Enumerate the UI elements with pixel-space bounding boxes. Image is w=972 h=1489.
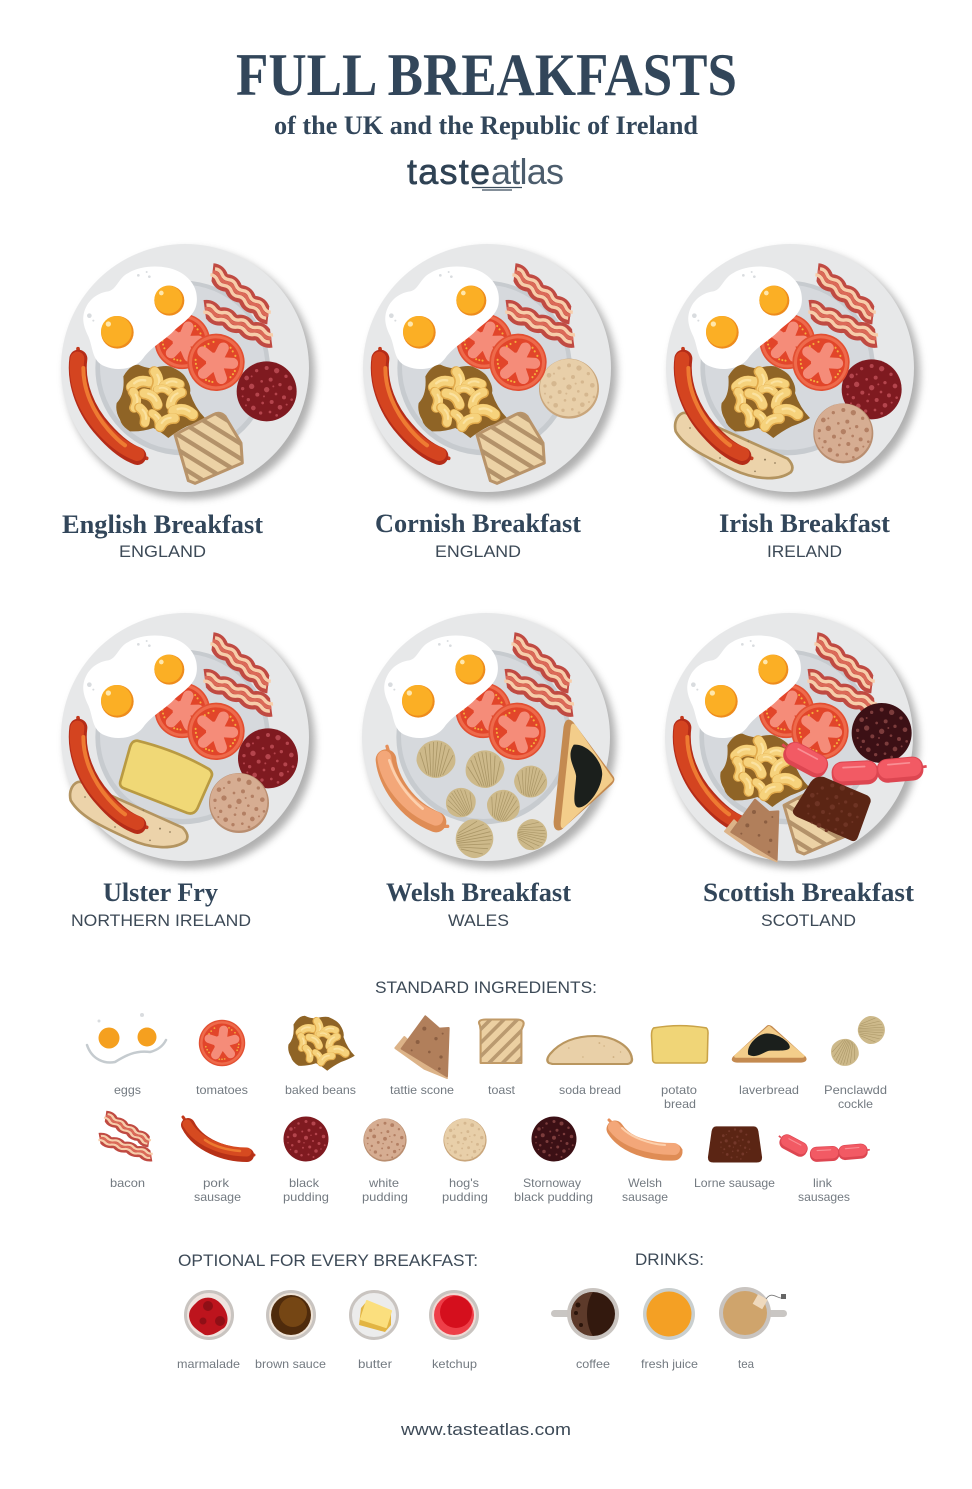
label: pork sausage: sausage bbox=[194, 1190, 241, 1204]
ingredient: Penclawdd cockles bbox=[415, 739, 550, 861]
icon: Lorne sausage bbox=[708, 1126, 762, 1163]
plate: English Breakfast bbox=[61, 244, 315, 506]
ingredient: eggs tomatoes bacon bbox=[687, 636, 878, 768]
title: FULL BREAKFASTS bbox=[236, 42, 737, 108]
ingredient: black pudding bbox=[238, 728, 298, 788]
label: brown sauce: brown sauce bbox=[255, 1357, 326, 1371]
ingredient: eggs tomatoes bacon bbox=[83, 636, 274, 768]
heading: Welsh Breakfast: Welsh Breakfast bbox=[386, 878, 571, 907]
plate: Cornish Breakfast bbox=[363, 244, 617, 506]
icon: bacon bbox=[98, 1113, 153, 1159]
label: Penclawdd cockle bbox=[824, 1083, 887, 1111]
label: butter: butter bbox=[358, 1357, 392, 1371]
heading: standard ingredients: STANDARD INGREDIENTS: bbox=[375, 978, 597, 997]
heading: English Breakfast: English Breakfast bbox=[62, 510, 263, 539]
label: laverbread: laverbread bbox=[739, 1083, 799, 1097]
icon: coffee bbox=[551, 1288, 619, 1340]
ingredient: baked beans bbox=[720, 734, 809, 807]
icon: ketchup bbox=[430, 1292, 478, 1338]
label: white pudding bbox=[362, 1176, 408, 1204]
logo: tasteatlas bbox=[407, 151, 564, 192]
ingredient: baked beans bbox=[116, 365, 205, 438]
label: link sausages bbox=[798, 1176, 850, 1204]
plate: Welsh Breakfast bbox=[362, 613, 619, 868]
heading: optional: OPTIONAL FOR EVERY BREAKFAST: bbox=[178, 1251, 478, 1270]
plate: Scottish Breakfast bbox=[665, 613, 927, 877]
label: tattie scone: tattie scone bbox=[390, 1083, 454, 1097]
plate: Ulster Fry bbox=[61, 613, 315, 868]
icon: brown sauce bbox=[268, 1292, 314, 1338]
icon: butter bbox=[350, 1292, 398, 1338]
label: Lorne sausage: Lorne sausage bbox=[694, 1176, 775, 1190]
label: black pudding: pudding bbox=[283, 1190, 329, 1204]
ingredient: eggs tomatoes bacon bbox=[83, 267, 274, 399]
label: Wales: WALES bbox=[448, 911, 509, 930]
label: link sausages: sausages bbox=[798, 1190, 850, 1204]
ingredient: eggs tomatoes bacon bbox=[385, 267, 576, 399]
icon: pork sausage bbox=[183, 1117, 254, 1155]
ingredient: black pudding bbox=[842, 359, 902, 419]
icon: black pudding bbox=[284, 1116, 328, 1162]
logo: tasteatlas: atlas bbox=[491, 151, 564, 192]
icon: soda bread bbox=[547, 1036, 632, 1064]
label: black pudding bbox=[283, 1176, 329, 1204]
label: coffee: coffee bbox=[576, 1357, 610, 1371]
label: Welsh sausage: Welsh bbox=[628, 1176, 662, 1190]
icon: potato bread bbox=[651, 1026, 708, 1063]
icon: hog's pudding bbox=[443, 1118, 487, 1162]
icon: Penclawdd cockle bbox=[827, 1016, 885, 1070]
icon: baked beans bbox=[288, 1016, 355, 1071]
heading: Cornish Breakfast: Cornish Breakfast bbox=[375, 509, 581, 538]
label: marmalade: marmalade bbox=[177, 1357, 240, 1371]
plate: Irish Breakfast bbox=[666, 244, 920, 499]
ingredient: soda bread bbox=[70, 782, 187, 847]
ingredient: pork sausage bbox=[682, 349, 752, 458]
label: England: ENGLAND bbox=[119, 542, 206, 561]
heading: Scottish Breakfast: Scottish Breakfast bbox=[703, 878, 914, 907]
heading: drinks: DRINKS: bbox=[635, 1250, 704, 1269]
label: eggs: eggs bbox=[114, 1083, 141, 1097]
label: potato bread bbox=[661, 1083, 697, 1111]
icon: toast bbox=[474, 1015, 528, 1069]
ingredient: eggs tomatoes bacon bbox=[384, 636, 575, 768]
ingredient: Stornoway black pudding bbox=[852, 703, 912, 763]
label: Welsh sausage bbox=[622, 1176, 668, 1204]
label: pork sausage bbox=[194, 1176, 241, 1204]
icon: tea bbox=[719, 1287, 787, 1339]
label: bacon: bacon bbox=[110, 1176, 145, 1190]
ingredient: tattie scone bbox=[725, 800, 778, 861]
label: tomatoes: tomatoes bbox=[196, 1083, 248, 1097]
label: tea: tea bbox=[738, 1357, 754, 1371]
icon: Welsh sausage bbox=[609, 1120, 681, 1152]
label: fresh juice: fresh juice bbox=[641, 1357, 698, 1371]
label: potato bread: potato bbox=[661, 1083, 697, 1097]
ingredient: hog's pudding bbox=[539, 359, 599, 419]
icon: laverbread bbox=[733, 1026, 806, 1062]
label: Stornoway black pudding: black pudding bbox=[514, 1190, 593, 1204]
label: Ireland: IRELAND bbox=[767, 542, 842, 561]
label: toast: toast bbox=[488, 1083, 516, 1097]
ingredient: toast bbox=[477, 388, 547, 506]
heading: Irish Breakfast: Irish Breakfast bbox=[719, 509, 890, 538]
ingredient: toast bbox=[175, 388, 245, 506]
label: Scotland: SCOTLAND bbox=[761, 911, 856, 930]
ingredient: potato bread bbox=[120, 741, 212, 813]
ingredient: pork sausage bbox=[379, 349, 449, 458]
ingredient: eggs tomatoes bacon bbox=[688, 267, 879, 399]
label: Welsh sausage: sausage bbox=[622, 1190, 668, 1204]
label: Stornoway black pudding bbox=[514, 1176, 593, 1204]
label: hog's pudding bbox=[442, 1176, 488, 1204]
icon: white pudding bbox=[363, 1118, 407, 1162]
label: ketchup: ketchup bbox=[432, 1357, 477, 1371]
label: white pudding: white bbox=[368, 1176, 399, 1190]
ingredient: white pudding bbox=[813, 403, 873, 463]
icon: tomatoes bbox=[199, 1020, 245, 1066]
label: baked beans: baked beans bbox=[285, 1083, 356, 1097]
label: potato bread: bread bbox=[664, 1097, 696, 1111]
label: black pudding: black bbox=[289, 1176, 320, 1190]
label: Stornoway black pudding: Stornoway bbox=[523, 1176, 581, 1190]
label: hog's pudding: pudding bbox=[442, 1190, 488, 1204]
icon: tattie scone bbox=[395, 1016, 449, 1078]
icon: fresh juice bbox=[643, 1288, 695, 1340]
footer url: www.tasteatlas.com bbox=[400, 1420, 571, 1439]
subtitle: of the UK and the Republic of Ireland bbox=[274, 111, 699, 140]
label: Penclawdd cockle: cockle bbox=[838, 1097, 873, 1111]
ingredient: baked beans bbox=[721, 365, 810, 438]
ingredient: link sausages bbox=[779, 738, 927, 786]
label: link sausages: link bbox=[813, 1176, 833, 1190]
icon: Stornoway black pudding bbox=[532, 1116, 576, 1162]
label: England: ENGLAND bbox=[435, 542, 521, 561]
label: hog's pudding: hog's bbox=[449, 1176, 479, 1190]
ingredient: toast bbox=[784, 759, 854, 877]
ingredient: Welsh sausage bbox=[384, 746, 448, 826]
heading: Ulster Fry: Ulster Fry bbox=[103, 878, 218, 907]
ingredient: soda bread bbox=[675, 413, 792, 478]
icon: marmalade bbox=[186, 1292, 232, 1338]
ingredient: laverbread bbox=[554, 721, 619, 834]
label: Northern Ireland: NORTHERN IRELAND bbox=[71, 911, 251, 930]
ingredient: white pudding bbox=[209, 773, 269, 833]
ingredient: black pudding bbox=[237, 361, 297, 421]
label: white pudding: pudding bbox=[362, 1190, 408, 1204]
ingredient: pork sausage bbox=[77, 718, 147, 827]
logo: tasteatlas: taste bbox=[407, 151, 490, 192]
icon: eggs bbox=[87, 1013, 166, 1062]
label: Penclawdd cockle: Penclawdd bbox=[824, 1083, 887, 1097]
icon: link sausages bbox=[777, 1132, 870, 1162]
ingredient: baked beans bbox=[418, 365, 507, 438]
ingredient: Lorne sausage bbox=[793, 777, 871, 841]
label: pork sausage: pork bbox=[203, 1176, 230, 1190]
label: soda bread: soda bread bbox=[559, 1083, 621, 1097]
ingredient: pork sausage bbox=[681, 718, 751, 827]
ingredient: pork sausage bbox=[77, 349, 147, 458]
